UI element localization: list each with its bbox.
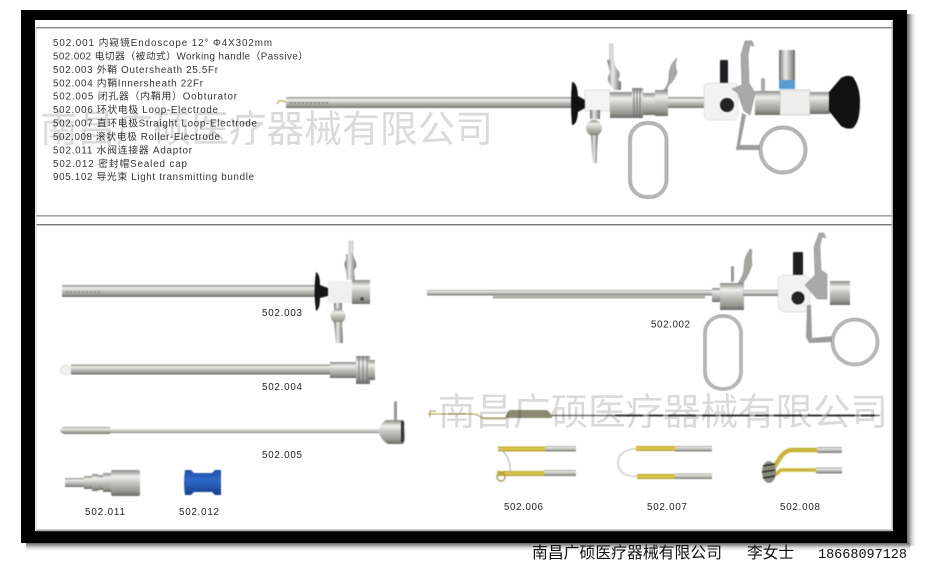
parts list text: 502.002 电切器（被动式）Working handle（Passive） [53, 50, 308, 62]
instrument: obturator 502.005 [60, 401, 405, 444]
parts list text [53, 36, 308, 183]
electrode 502.007 [618, 446, 712, 479]
label 502.008: 502.008 [780, 502, 821, 513]
footer contact line: 18668097128 [818, 548, 907, 563]
parts list text: 502.012 密封帽Sealed cap [53, 157, 188, 170]
instrument: sealed cap 502.012 [184, 470, 221, 495]
parts list text: 502.001 内窥镜Endoscope 12° Φ4X302mm [53, 36, 272, 49]
parts list text: 502.007 直环电极Straight Loop-Electrode [53, 116, 258, 130]
footer contact line: 李女士 [747, 543, 794, 562]
parts list text: 502.011 水阀连接器 Adaptor [53, 144, 193, 156]
label 502.011: 502.011 [85, 507, 125, 518]
watermark top: 南昌广硕医疗器械有限公司 [40, 108, 493, 150]
watermark bottom: 南昌广硕医疗器械有限公司 [438, 391, 888, 433]
parts list text: 502.003 外鞘 Outersheath 25.5Fr [53, 63, 219, 76]
parts list text: 502.004 内鞘Innersheath 22Fr [53, 76, 204, 90]
instrument: adaptor 502.011 [65, 470, 140, 496]
label 502.005: 502.005 [262, 450, 303, 461]
electrode 502.006 [497, 446, 576, 481]
parts list text: 502.008 滚状电极 Roller-Electrode [53, 130, 221, 143]
instrument: outer sheath 502.003 [62, 241, 370, 343]
parts list text: 502.006 环状电极 Loop-Electrode [53, 103, 219, 116]
assembled resectoscope [277, 41, 860, 197]
label 502.003: 502.003 [262, 308, 303, 319]
footer contact line: 南昌广硕医疗器械有限公司 [532, 544, 722, 562]
electrode 502.008 [762, 447, 842, 483]
label 502.004: 502.004 [262, 382, 303, 393]
instrument: full electrode [428, 410, 880, 418]
light source arm [704, 41, 806, 172]
parts list text: 905.102 导光束 Light transmitting bundle [53, 170, 255, 183]
instrument: working handle 502.002 [427, 233, 878, 389]
instrument: inner sheath 502.004 [60, 356, 375, 384]
label 502.007: 502.007 [647, 502, 687, 513]
footer contact line [532, 543, 907, 563]
label 502.006: 502.006 [504, 502, 544, 513]
parts list text: 502.005 闭孔器（内鞘用）Oobturator [53, 90, 238, 102]
label 502.002: 502.002 [651, 320, 690, 330]
label 502.012: 502.012 [179, 507, 219, 518]
eyepiece and light post [779, 50, 860, 129]
